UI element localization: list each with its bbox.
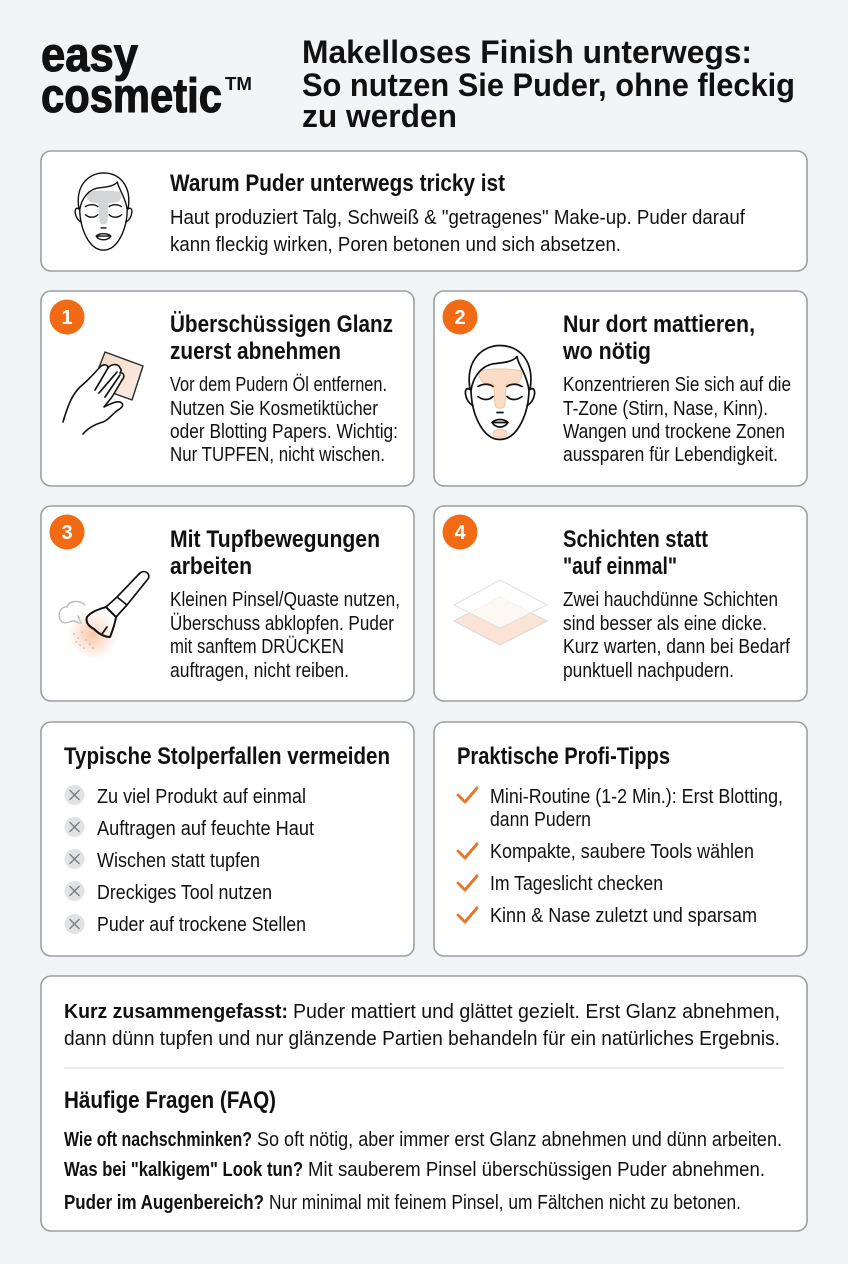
body text: Nur TUPFEN, nicht wischen.: [170, 444, 385, 466]
icon: powder brush: [59, 572, 149, 659]
body text: Haut produziert Talg, Schweiß & "getragenes" Make-up. Puder darauf: [170, 207, 745, 229]
panel: summary and FAQ: [41, 976, 807, 1231]
panel: step 1: [41, 291, 414, 486]
FAQ item: Wie oft nachschminken?: [64, 1129, 252, 1151]
body text: Kurz warten, dann bei Bedarf: [563, 636, 790, 658]
logo: cosmetic: [41, 70, 222, 123]
list item: Puder auf trockene Stellen: [97, 914, 306, 936]
badge 2: [442, 300, 478, 334]
heading: Überschüssigen Glanz: [170, 311, 393, 338]
logo: easy: [41, 29, 138, 82]
body text: [170, 589, 400, 682]
body text: punktuell nachpudern.: [563, 660, 734, 682]
panel: step 4: [434, 506, 807, 701]
body text: Nutzen Sie Kosmetiktücher: [170, 398, 378, 420]
list item: Mini-Routine (1-2 Min.): Erst Blotting,: [490, 786, 783, 808]
body text: auftragen, nicht reiben.: [170, 660, 349, 682]
body text: Wangen und trockene Zonen: [563, 421, 785, 443]
body text: aussparen für Lebendigkeit.: [563, 444, 778, 466]
list item: Dreckiges Tool nutzen: [97, 882, 272, 904]
list item: Zu viel Produkt auf einmal: [97, 786, 306, 808]
body text: [170, 374, 398, 466]
list item: Kompakte, saubere Tools wählen: [490, 841, 754, 863]
heading: zuerst abnehmen: [170, 338, 341, 365]
title: [302, 34, 795, 134]
list item: Im Tageslicht checken: [490, 873, 663, 895]
heading: [170, 311, 393, 365]
heading: Mit Tupfbewegungen: [170, 526, 380, 553]
heading: arbeiten: [170, 553, 252, 580]
list item: dann Pudern: [490, 809, 591, 831]
FAQ item: [64, 1159, 765, 1181]
body text: [170, 207, 745, 256]
heading: "auf einmal": [563, 553, 677, 580]
body text: T-Zone (Stirn, Nase, Kinn).: [563, 398, 768, 420]
FAQ item: Was bei "kalkigem" Look tun?: [64, 1159, 303, 1181]
badge 1: [50, 300, 84, 334]
heading: Typische Stolperfallen vermeiden: [64, 743, 390, 770]
heading: wo nötig: [562, 338, 651, 365]
icon: face with T-zone: [465, 346, 535, 440]
title: So nutzen Sie Puder, ohne fleckig: [302, 67, 795, 103]
body text: [563, 589, 790, 682]
body text: [563, 374, 791, 466]
icon: hand with tissue: [63, 352, 143, 434]
body text: Vor dem Pudern Öl entfernen.: [170, 374, 387, 396]
heading: Praktische Profi-Tipps: [457, 743, 670, 770]
FAQ heading: Häufige Fragen (FAQ): [64, 1087, 276, 1114]
badge 1: 1: [61, 307, 73, 329]
body text: Konzentrieren Sie sich auf die: [563, 374, 791, 396]
body text: Kleinen Pinsel/Quaste nutzen,: [170, 589, 400, 611]
badge 4: [442, 514, 478, 550]
panel: step 3: [41, 506, 414, 701]
summary text: dann dünn tupfen und nur glänzende Partien behandeln für ein natürliches Ergebnis.: [64, 1028, 780, 1050]
body text: sind besser als eine dicke.: [563, 613, 767, 635]
badge 3: [50, 514, 84, 550]
logo: TM: [225, 74, 252, 94]
list item: [458, 786, 783, 831]
list item: Kinn & Nase zuletzt und sparsam: [490, 905, 757, 927]
list item: Wischen statt tupfen: [97, 850, 260, 872]
body text: Überschuss abklopfen. Puder: [170, 613, 394, 635]
badge 2: 2: [454, 307, 466, 329]
title: Makelloses Finish unterwegs:: [302, 34, 752, 70]
badge 4: 4: [454, 522, 466, 544]
list item: Auftragen auf feuchte Haut: [97, 818, 314, 840]
heading: Warum Puder unterwegs tricky ist: [170, 170, 505, 197]
panel: pro tips: [434, 722, 807, 956]
FAQ item: [64, 1129, 782, 1151]
summary text: Kurz zusammengefasst:: [64, 1001, 288, 1023]
title: zu werden: [302, 98, 457, 134]
heading: Nur dort mattieren,: [563, 311, 755, 338]
panel: why powder is tricky: [41, 151, 807, 271]
badge 3: 3: [61, 522, 73, 544]
FAQ item: Mit sauberem Pinsel überschüssigen Puder abnehmen.: [308, 1159, 765, 1181]
heading: Schichten statt: [563, 526, 708, 553]
heading: [170, 526, 380, 580]
summary text: [64, 1001, 780, 1050]
icon: face with shiny T-zone: [75, 173, 132, 250]
heading: [563, 526, 708, 580]
body text: mit sanftem DRÜCKEN: [170, 636, 344, 658]
heading: [562, 311, 755, 365]
body text: kann fleckig wirken, Poren betonen und sich absetzen.: [170, 234, 621, 256]
summary text: Puder mattiert und glättet gezielt. Erst Glanz abnehmen,: [293, 1001, 780, 1023]
body text: Zwei hauchdünne Schichten: [563, 589, 778, 611]
FAQ item: So oft nötig, aber immer erst Glanz abnehmen und dünn arbeiten.: [257, 1129, 782, 1151]
FAQ item: Puder im Augenbereich?: [64, 1192, 264, 1214]
FAQ item: [64, 1192, 741, 1214]
panel: step 2: [434, 291, 807, 486]
body text: oder Blotting Papers. Wichtig:: [170, 421, 398, 443]
logo: [41, 29, 252, 123]
panel: pitfalls: [41, 722, 414, 956]
icon: powder layers: [454, 580, 547, 645]
FAQ item: Nur minimal mit feinem Pinsel, um Fältchen nicht zu betonen.: [269, 1192, 741, 1214]
